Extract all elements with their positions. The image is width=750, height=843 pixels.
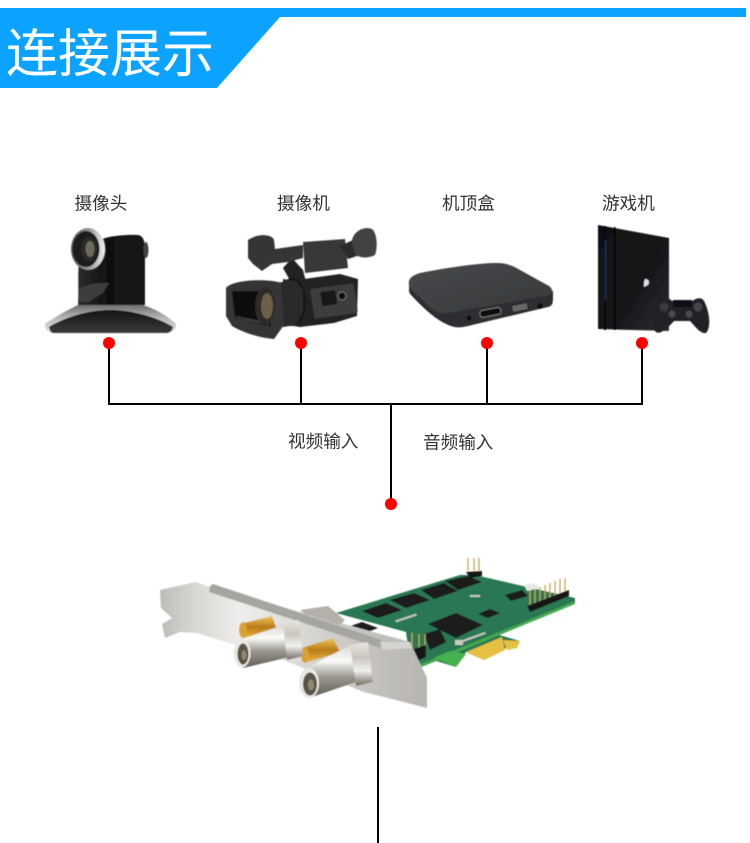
bottom connector line xyxy=(377,727,379,843)
label: 视频输入: 视频输入 xyxy=(288,432,358,452)
chips xyxy=(345,576,528,650)
icon: camcorder xyxy=(226,228,377,339)
PCB xyxy=(336,575,575,668)
board components xyxy=(395,595,486,645)
capture card photo xyxy=(160,558,575,708)
header banner xyxy=(0,8,746,88)
BNC connector 2 xyxy=(299,642,373,698)
label: 机顶盒: 机顶盒 xyxy=(442,194,495,214)
gold fingers xyxy=(466,637,505,660)
label: 摄像头: 摄像头 xyxy=(74,194,127,214)
label: 摄像机: 摄像机 xyxy=(277,194,330,214)
marker dots xyxy=(103,337,648,510)
pin headers xyxy=(412,558,565,660)
title: 连接展示 xyxy=(6,26,214,84)
bracket xyxy=(160,582,427,708)
connector lines xyxy=(108,343,643,504)
icon: game console xyxy=(598,225,709,333)
icon: PTZ camera xyxy=(45,228,176,333)
icon: set-top box xyxy=(409,263,553,327)
BNC connector 1 xyxy=(234,620,303,668)
label: 游戏机: 游戏机 xyxy=(602,194,655,214)
gold SMA connectors xyxy=(239,616,340,663)
label: 音频输入: 音频输入 xyxy=(423,432,493,452)
